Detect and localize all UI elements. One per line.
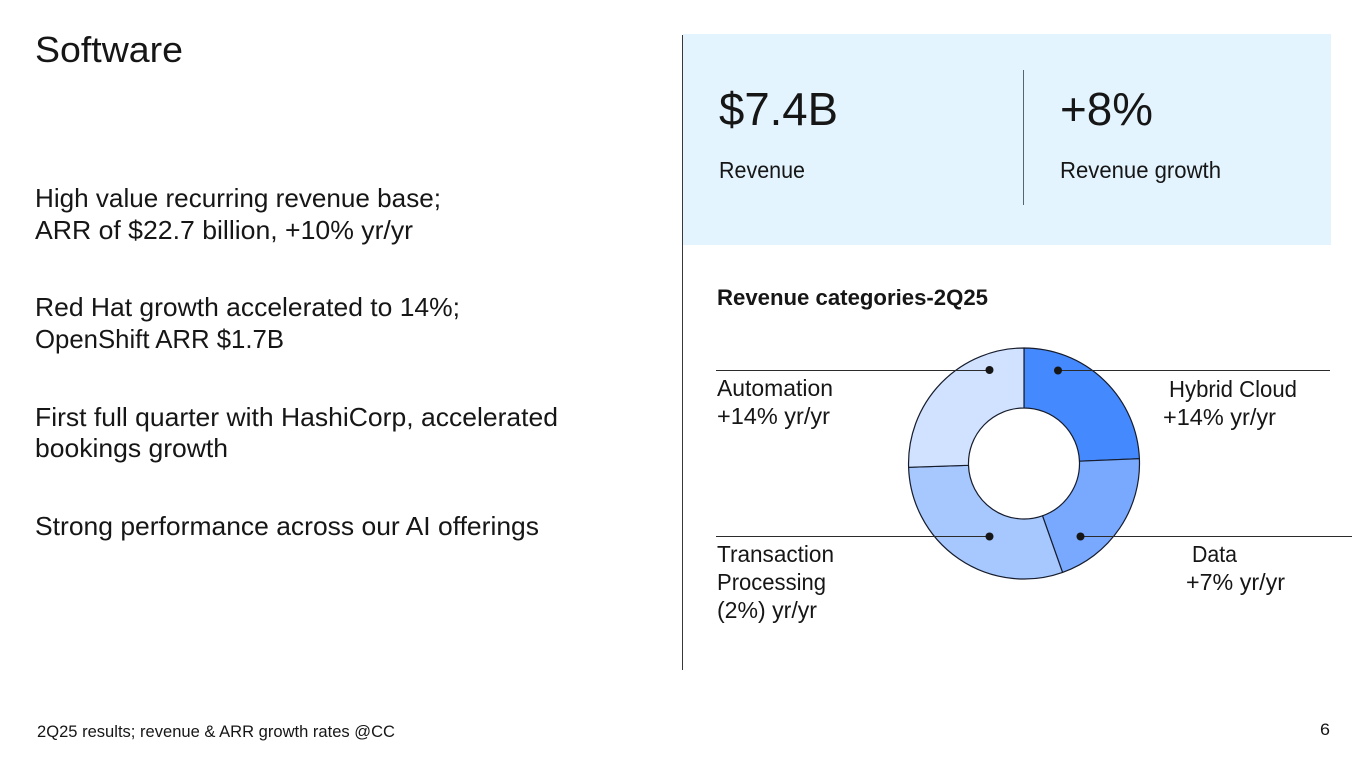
point: HashiCorp: bookings growth	[35, 433, 228, 463]
point: Red Hat growth: Red Hat growth accelerated to 14%;	[35, 292, 460, 322]
title: Software	[35, 29, 183, 70]
metric: revenue value: $7.4B	[719, 83, 838, 135]
callout: Transaction Processing: Transaction	[717, 541, 834, 567]
point: Red Hat growth	[35, 292, 460, 354]
segment: Data	[1042, 459, 1140, 572]
text block: key points	[35, 183, 558, 541]
segment: Transaction Processing	[909, 465, 1063, 579]
panel: revenue metrics	[683, 34, 1331, 245]
point: recurring revenue: ARR of $22.7 billion, +10% yr/yr	[35, 215, 413, 245]
callout: Hybrid Cloud	[1054, 366, 1330, 430]
page number: 6	[1320, 720, 1330, 739]
footnote: 2Q25 results; revenue & ARR growth rates @CC	[37, 722, 395, 741]
segment: Hybrid Cloud	[1024, 348, 1139, 461]
callout: Automation	[716, 366, 994, 429]
segment: Automation	[909, 348, 1024, 467]
chart heading: Revenue categories-2Q25	[717, 285, 988, 310]
vertical divider	[682, 35, 683, 670]
donut chart	[909, 348, 1140, 579]
point: AI offerings: Strong performance across our AI offerings	[35, 511, 539, 541]
callout: Hybrid Cloud: Hybrid Cloud	[1169, 376, 1297, 402]
callout: Hybrid Cloud: +14% yr/yr	[1163, 404, 1276, 430]
point: Red Hat growth: OpenShift ARR $1.7B	[35, 324, 284, 354]
point: HashiCorp	[35, 402, 558, 463]
metric: revenue label: Revenue	[719, 157, 805, 183]
callout: Data: +7% yr/yr	[1186, 569, 1285, 595]
callout: Transaction Processing	[716, 532, 994, 623]
metric: growth value: +8%	[1060, 83, 1153, 135]
callout: Automation: +14% yr/yr	[717, 403, 830, 429]
point: recurring revenue	[35, 183, 441, 245]
point: HashiCorp: First full quarter with HashiCorp, accelerated	[35, 402, 558, 432]
point: recurring revenue: High value recurring revenue base;	[35, 183, 441, 213]
metric: growth label: Revenue growth	[1060, 157, 1221, 183]
callout: Transaction Processing: Processing	[717, 569, 826, 595]
callout: Data	[1076, 532, 1352, 595]
callout: Automation: Automation	[717, 375, 833, 401]
callout: Transaction Processing: (2%) yr/yr	[717, 597, 817, 623]
panel divider	[1023, 70, 1024, 205]
callout: Data: Data	[1192, 541, 1237, 567]
